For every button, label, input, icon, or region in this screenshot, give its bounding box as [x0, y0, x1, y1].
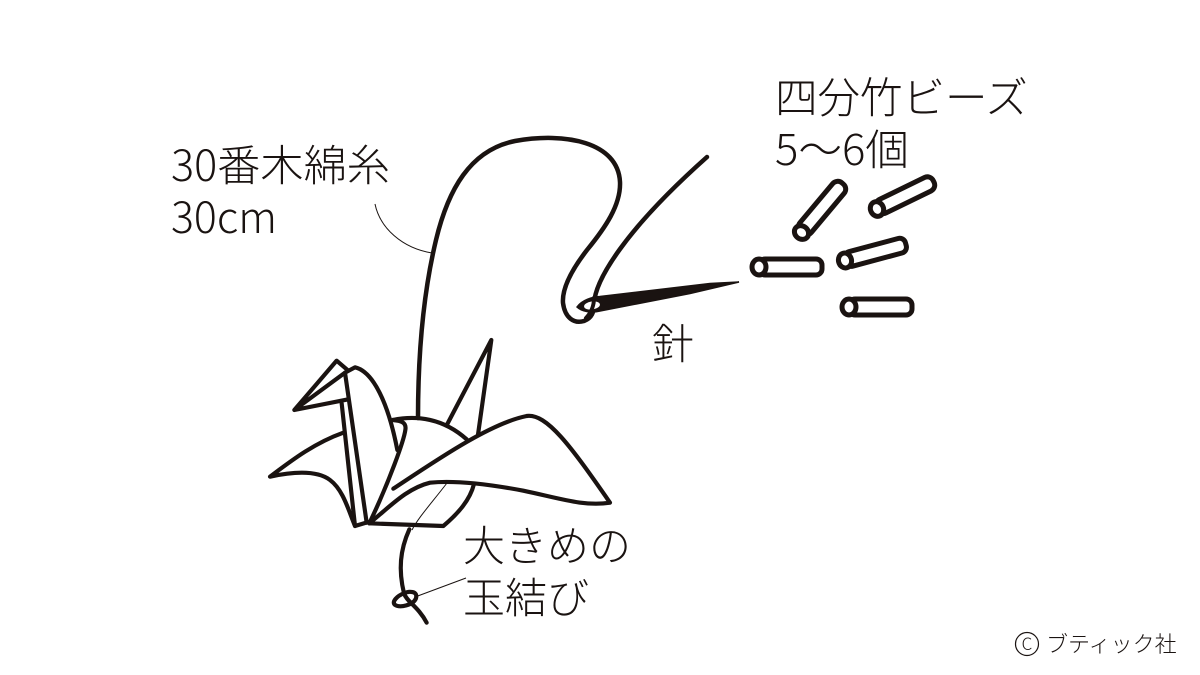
- bead 1: [792, 179, 848, 242]
- beads label: 四分竹ビーズ: [775, 65, 1028, 126]
- thread label: 30cm: [171, 184, 277, 246]
- beads label: [775, 65, 1028, 178]
- origami crane: [270, 340, 610, 623]
- needle: [577, 282, 739, 318]
- tail wing left: [270, 433, 368, 526]
- lower thread: [401, 529, 427, 623]
- bead 5: [842, 299, 912, 315]
- knot label: 玉結び: [463, 565, 589, 626]
- thin leader to body: [412, 483, 447, 530]
- bead 2: [868, 175, 937, 219]
- thread: [418, 138, 707, 418]
- neck: [342, 367, 397, 526]
- bead 3: [752, 259, 822, 275]
- head: [294, 361, 348, 410]
- bead 4: [837, 237, 908, 269]
- copyright mark: C: [1022, 630, 1032, 655]
- knot label: [463, 513, 631, 626]
- raised tail: [447, 340, 491, 435]
- knot: [394, 592, 416, 606]
- knot label: 大きめの: [463, 513, 631, 574]
- body top: [369, 418, 467, 523]
- needle label: 針: [652, 311, 694, 372]
- thread label: 30番木綿糸: [171, 132, 390, 194]
- publisher credit: ブティック社: [1046, 627, 1177, 659]
- front wing: [369, 416, 610, 523]
- copyright mark: [1016, 630, 1038, 656]
- thread leader line: [375, 204, 432, 253]
- beads label: 5〜6個: [775, 117, 909, 178]
- thread label: [171, 132, 390, 246]
- belly: [369, 484, 474, 526]
- beads: [752, 175, 937, 315]
- knot leader line: [415, 578, 466, 597]
